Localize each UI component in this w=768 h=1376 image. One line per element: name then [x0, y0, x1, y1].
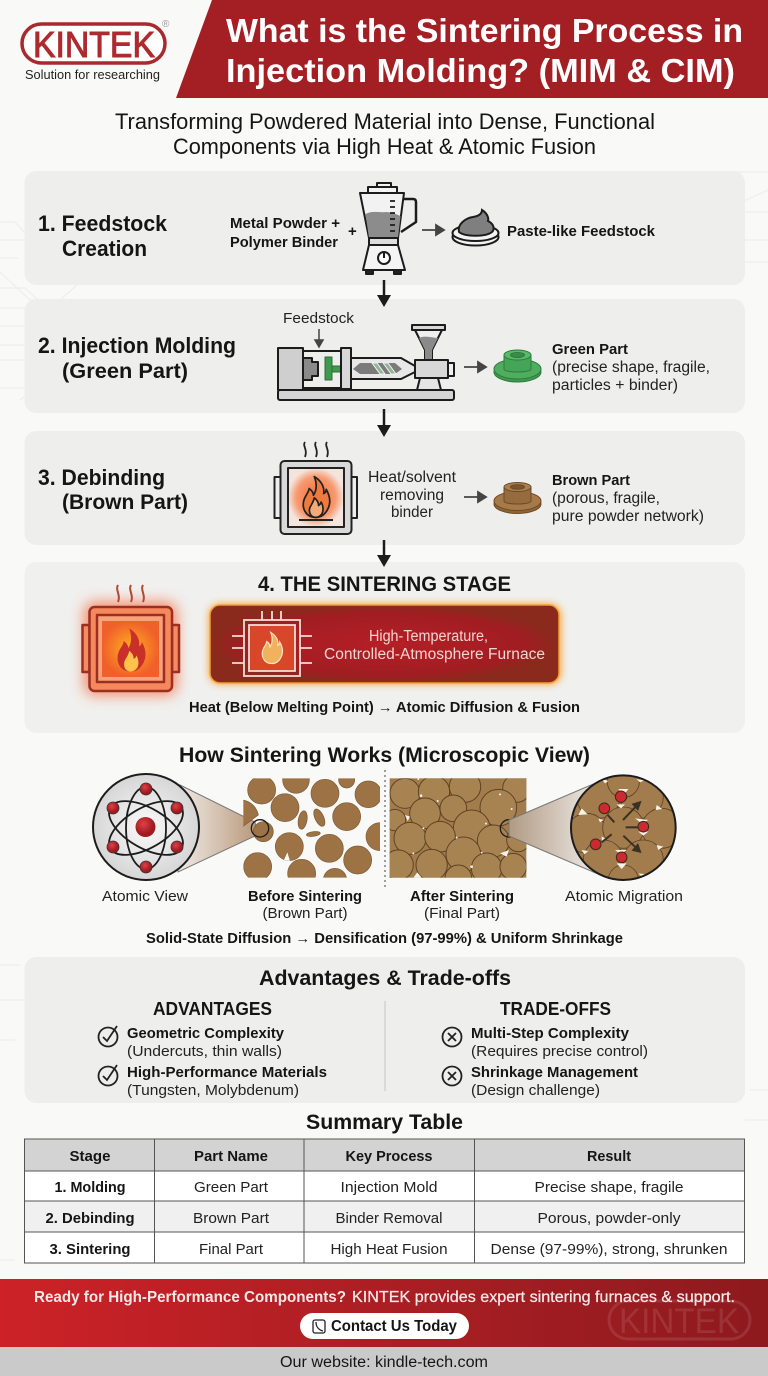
panel: step 1 feedstock creation: [24, 171, 745, 285]
table row: molding: 1. Molding: [54, 1180, 126, 1196]
diagram labels: [102, 888, 683, 922]
diagram labels: (Brown Part): [262, 905, 348, 922]
table row: sintering: Dense (97-99%), strong, shrunken: [490, 1242, 728, 1258]
table row: molding: Green Part: [194, 1180, 268, 1196]
table row: molding: Injection Mold: [340, 1180, 438, 1196]
furnace callout text: Controlled-Atmosphere Furnace: [324, 646, 545, 663]
table header row: Part Name: [194, 1149, 268, 1165]
column: trade-offs: Multi-Step Complexity: [471, 1025, 630, 1042]
diagram: microscopic view: [93, 766, 683, 922]
icon: check: [98, 1065, 118, 1086]
debinding text: [368, 469, 457, 521]
footer call to action: [0, 1279, 768, 1347]
icon: cross: [442, 1066, 462, 1086]
icon: paste feedstock: [452, 210, 498, 246]
diagram labels: Atomic Migration: [565, 888, 683, 905]
advantages heading: Advantages & Trade-offs: [259, 967, 511, 990]
green part label: [552, 341, 710, 394]
diagram labels: (Final Part): [424, 905, 500, 922]
column: trade-offs: (Requires precise control): [471, 1043, 648, 1060]
dotted divider: [384, 770, 386, 890]
brown part label: [552, 472, 704, 525]
column: advantages: (Undercuts, thin walls): [127, 1043, 282, 1060]
title: [226, 12, 743, 89]
paste label: Paste-like Feedstock: [507, 223, 656, 240]
particles: before sintering: [243, 778, 380, 878]
step 3 heading: (Brown Part): [62, 491, 188, 514]
step 1 heading: 1. Feedstock: [38, 211, 168, 236]
panel: step 2 injection molding: [24, 299, 745, 413]
table row: molding: [54, 1180, 684, 1196]
arrow: step 2 to 3: [377, 409, 391, 437]
heading: how sintering works: How Sintering Works (Microscopic View): [179, 744, 590, 767]
step 2 heading: (Green Part): [62, 360, 188, 383]
step 1 heading: Creation: [62, 236, 147, 261]
logo: Solution for researching: [25, 67, 160, 82]
step 3 heading: [38, 465, 188, 514]
particles: after sintering: [390, 778, 526, 878]
table row: debinding: Binder Removal: [336, 1211, 442, 1227]
icon: brown part: [494, 482, 541, 514]
table row: sintering: 3. Sintering: [50, 1242, 130, 1258]
ingredients text: Metal Powder +: [230, 215, 340, 232]
contact button: Contact Us Today: [331, 1318, 457, 1335]
icon: atomic migration: [570, 774, 677, 881]
table: summary: [24, 1139, 744, 1263]
diagram labels: Before Sintering: [248, 888, 362, 905]
brown part label: (porous, fragile,: [552, 490, 660, 507]
title: Injection Molding? (MIM & CIM): [226, 52, 735, 89]
column: advantages: [98, 999, 327, 1099]
step 1 heading: [38, 211, 168, 261]
table row: sintering: Final Part: [199, 1242, 263, 1258]
arrow: to green part: [464, 362, 486, 372]
icon: phone: [313, 1320, 325, 1333]
subtitle: Transforming Powdered Material into Dense, Functional: [115, 109, 655, 134]
table header row: Key Process: [346, 1149, 432, 1165]
cta text: [34, 1289, 735, 1306]
title: What is the Sintering Process in: [226, 12, 743, 49]
panel: advantages and trade-offs: [24, 957, 745, 1103]
table row: sintering: [50, 1242, 728, 1258]
furnace callout text: [324, 628, 545, 663]
column: advantages: High-Performance Materials: [127, 1064, 327, 1081]
icon: blender: [360, 183, 416, 274]
icon: furnace outline: [232, 611, 312, 676]
contact button: [300, 1313, 469, 1339]
logo: ®: [162, 19, 170, 30]
debinding text: removing: [380, 487, 444, 504]
panel: step 3 debinding: [24, 431, 745, 545]
icon: cross: [442, 1028, 462, 1046]
website bar: [0, 1347, 768, 1376]
green part label: particles + binder): [552, 377, 678, 394]
table row: debinding: [46, 1211, 681, 1227]
column: advantages: ADVANTAGES: [153, 999, 272, 1019]
icon: atom view: [93, 774, 199, 880]
cta text: Ready for High-Performance Components?: [34, 1289, 346, 1306]
table row: sintering: High Heat Fusion: [330, 1242, 448, 1258]
zoom cone right: [509, 782, 598, 874]
arrow: step 3 to 4: [377, 540, 391, 567]
step 2 heading: [38, 333, 236, 383]
icon: glowing furnace: [82, 585, 179, 695]
ingredients text: Polymer Binder: [230, 234, 338, 251]
heading: summary table: Summary Table: [306, 1111, 463, 1134]
brown part label: pure powder network): [552, 508, 704, 525]
watermark logo: KINTEK: [619, 1302, 739, 1341]
feedstock label and arrow: [283, 310, 355, 347]
step 2 heading: 2. Injection Molding: [38, 333, 236, 358]
arrow: to paste: [422, 225, 444, 235]
table header row: Stage: [70, 1149, 110, 1165]
table row: debinding: Porous, powder-only: [538, 1211, 681, 1227]
step 4 heading: 4. THE SINTERING STAGE: [258, 573, 511, 596]
debinding text: Heat/solvent: [368, 469, 457, 486]
column: advantages: Geometric Complexity: [127, 1025, 285, 1042]
subtitle: [115, 109, 655, 159]
zoom cone left: [178, 785, 257, 872]
table header row: [70, 1149, 631, 1165]
column: trade-offs: (Design challenge): [471, 1082, 600, 1099]
feedstock label and arrow: Feedstock: [283, 310, 355, 327]
brown part label: Brown Part: [552, 472, 630, 489]
cta text: KINTEK provides expert sintering furnaces & support.: [352, 1289, 735, 1306]
column: trade-offs: Shrinkage Management: [471, 1064, 638, 1081]
table header row: Result: [587, 1149, 631, 1165]
ingredients text: [230, 215, 357, 251]
icon: debinding furnace: [274, 442, 357, 534]
logo: KINTEK: [33, 24, 155, 65]
sintering caption: Heat (Below Melting Point) → Atomic Diffusion & Fusion: [189, 700, 580, 716]
ingredients text: +: [348, 223, 357, 240]
icon: check: [98, 1026, 118, 1046]
panel: step 4 sintering stage: [24, 562, 745, 733]
diagram labels: After Sintering: [410, 888, 514, 905]
circuit pattern decoration: [0, 172, 768, 1260]
icon: green part: [494, 350, 541, 382]
green part label: (precise shape, fragile,: [552, 359, 710, 376]
green part label: Green Part: [552, 341, 628, 358]
logo: [22, 19, 170, 82]
furnace callout box: [209, 604, 561, 684]
furnace callout text: High-Temperature,: [369, 628, 488, 645]
column: trade-offs: TRADE-OFFS: [500, 999, 611, 1019]
step 3 heading: 3. Debinding: [38, 465, 165, 490]
table row: molding: Precise shape, fragile: [534, 1180, 684, 1196]
icon: injection molding machine: [278, 325, 454, 400]
table row: debinding: 2. Debinding: [46, 1211, 134, 1227]
subtitle: Components via High Heat & Atomic Fusion: [173, 134, 596, 159]
diagram labels: Atomic View: [102, 888, 188, 905]
column: trade-offs: [442, 999, 648, 1099]
debinding text: binder: [391, 504, 433, 521]
table row: debinding: Brown Part: [193, 1211, 269, 1227]
arrow: to brown part: [464, 492, 486, 502]
diffusion caption: Solid-State Diffusion → Densification (97-99%) & Uniform Shrinkage: [146, 931, 623, 947]
arrow: step 1 to 2: [377, 280, 391, 307]
header banner: [176, 0, 768, 98]
column: advantages: (Tungsten, Molybdenum): [127, 1082, 299, 1099]
website bar: Our website: kindle-tech.com: [280, 1354, 488, 1371]
